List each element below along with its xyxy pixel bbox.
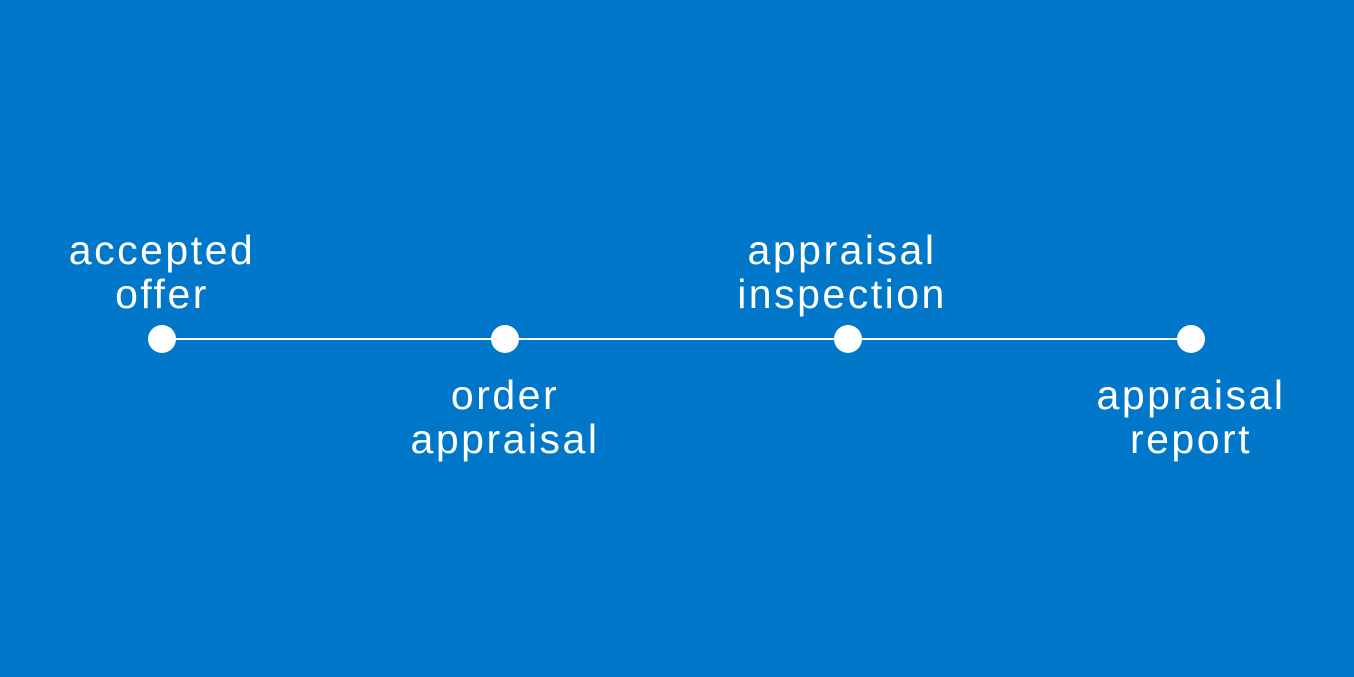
label: appraisal report: report <box>1130 416 1252 462</box>
dot: accepted offer <box>148 325 176 353</box>
label: order appraisal: appraisal <box>411 416 599 462</box>
timeline line <box>162 338 1191 340</box>
label: appraisal inspection: inspection <box>737 271 947 317</box>
dot: order appraisal <box>491 325 519 353</box>
label: appraisal inspection <box>737 227 947 317</box>
dot: appraisal report <box>1177 325 1205 353</box>
label: accepted offer: offer <box>115 271 209 317</box>
label: appraisal inspection: appraisal <box>748 227 936 273</box>
dot: appraisal inspection <box>834 325 862 353</box>
label: appraisal report: appraisal <box>1097 372 1285 418</box>
label: order appraisal <box>411 372 599 462</box>
label: accepted offer <box>69 227 255 317</box>
label: appraisal report <box>1097 372 1285 462</box>
label: accepted offer: accepted <box>69 227 255 273</box>
label: order appraisal: order <box>451 372 559 418</box>
